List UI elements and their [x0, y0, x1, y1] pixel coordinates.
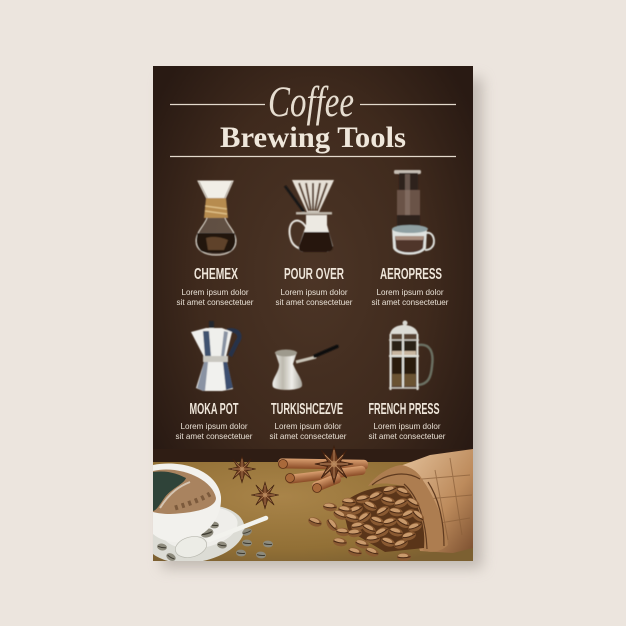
bottom illustration band	[153, 446, 473, 561]
label: TURKISHCEZVE	[271, 401, 343, 418]
star anise	[315, 446, 353, 483]
tool: French Press: sit amet consectetuer	[369, 432, 446, 441]
cinnamon sticks	[278, 458, 368, 493]
saucer	[153, 506, 244, 561]
label: AEROPRESS	[380, 266, 442, 283]
star anise	[228, 456, 256, 483]
tool: Moka Pot: sit amet consectetuer	[176, 432, 253, 441]
poster shadow	[162, 78, 482, 568]
tool: Chemex	[177, 181, 254, 307]
icon: Pour Over	[285, 180, 334, 252]
icon: Turkish Cezve	[272, 346, 337, 390]
coffee beans pile	[307, 484, 426, 561]
tool: Aeropress	[372, 170, 449, 307]
grey coffee beans	[156, 521, 273, 562]
icon: Chemex	[196, 181, 236, 255]
spoon	[173, 518, 266, 561]
description: Lorem ipsum dolor	[376, 288, 444, 297]
tool: Turkish Cezve: sit amet consectetuer	[270, 432, 347, 441]
star anise	[251, 482, 279, 509]
heading: Brewing Tools: Brewing Tools	[220, 121, 406, 154]
label: FRENCH PRESS	[368, 401, 440, 418]
icon: French Press	[389, 320, 432, 390]
tool: Turkish Cezve	[270, 346, 347, 441]
description: Lorem ipsum dolor	[373, 422, 441, 431]
poster panel	[141, 66, 473, 570]
tool: Pour Over: sit amet consectetuer	[276, 298, 353, 307]
label: MOKA POT	[190, 401, 239, 418]
label: CHEMEX	[194, 266, 238, 283]
tool: Pour Over	[276, 180, 353, 307]
title: Coffee: Coffee	[268, 79, 354, 126]
tool: Aeropress: sit amet consectetuer	[372, 298, 449, 307]
label: POUR OVER	[284, 266, 344, 283]
tool: French Press	[368, 320, 446, 441]
description: Lorem ipsum dolor	[280, 288, 348, 297]
title block	[170, 79, 456, 156]
coffee cup	[153, 464, 221, 542]
description: Lorem ipsum dolor	[274, 422, 342, 431]
poster infographic	[153, 66, 488, 574]
icon: Moka Pot	[191, 321, 239, 391]
burlap sack	[368, 449, 473, 553]
tool: Moka Pot	[176, 321, 253, 441]
tool: Chemex: sit amet consectetuer	[177, 298, 254, 307]
description: Lorem ipsum dolor	[180, 422, 248, 431]
description: Lorem ipsum dolor	[181, 288, 249, 297]
icon: Aeropress	[392, 170, 434, 255]
